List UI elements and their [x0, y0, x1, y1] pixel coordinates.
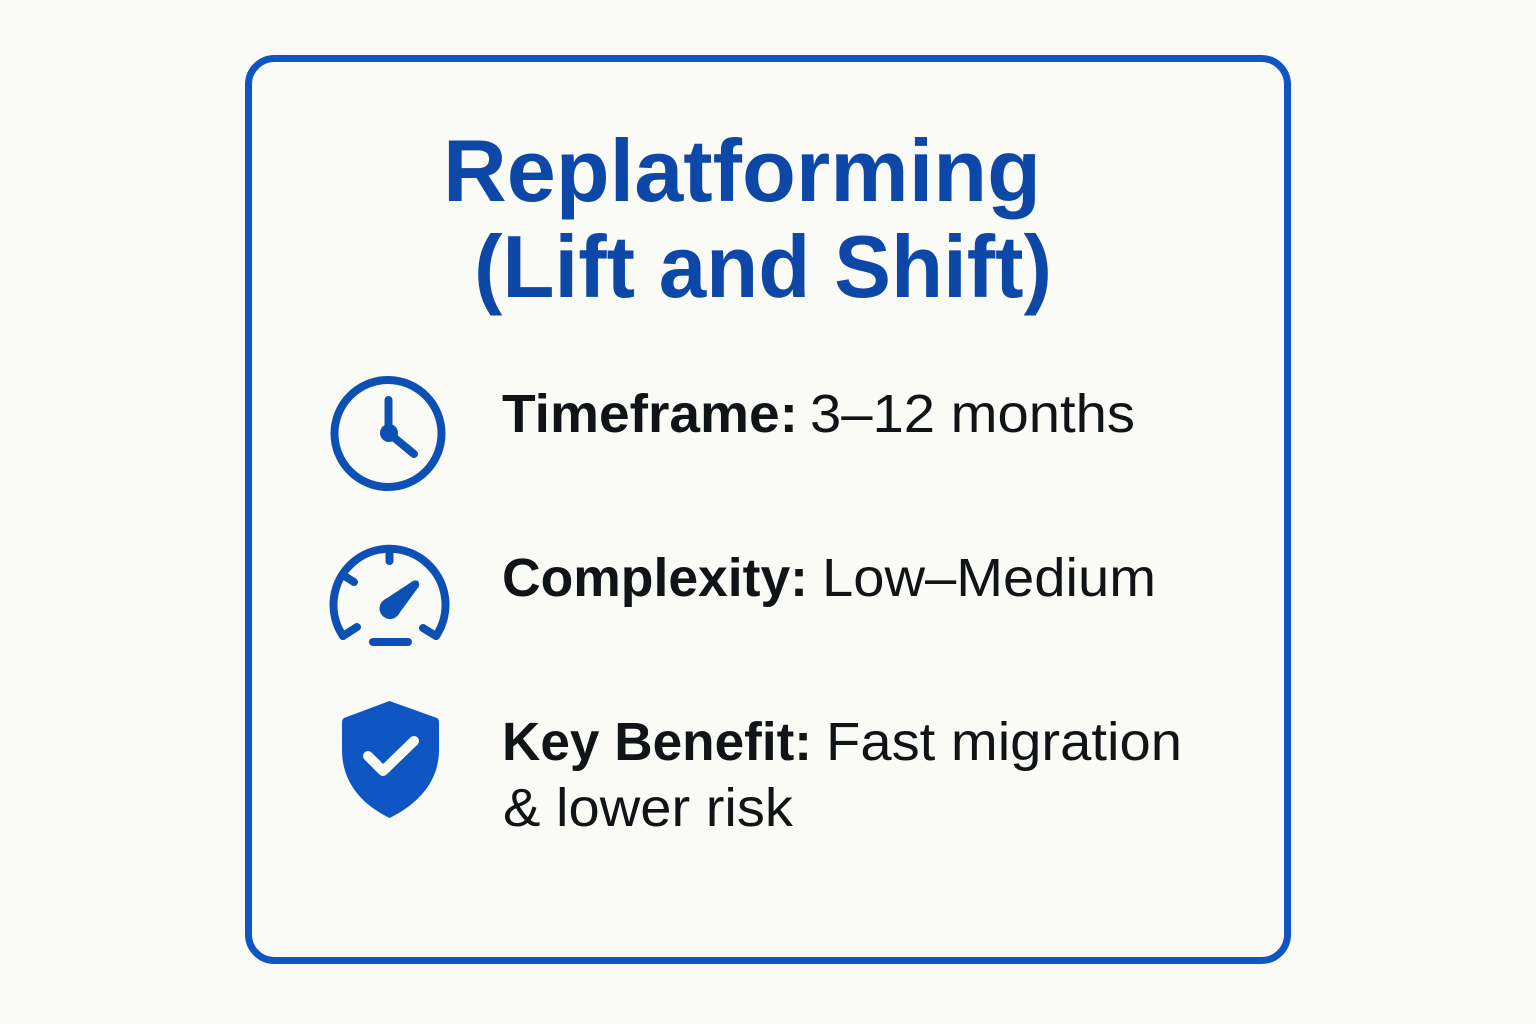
icon: shield with check: [342, 701, 439, 818]
row: key benefit: Key Benefit:: [502, 712, 812, 772]
title: [443, 121, 1052, 316]
panel: card: [248, 58, 1288, 960]
icon: clock: [334, 380, 442, 487]
row: complexity: Low–Medium: [822, 548, 1156, 608]
row: complexity: Complexity:: [502, 548, 808, 608]
row: timeframe: 3–12 months: [810, 384, 1135, 444]
row: key benefit: & lower risk: [503, 778, 794, 838]
row: timeframe: Timeframe:: [502, 384, 798, 444]
icon: gauge: [334, 549, 446, 642]
title: Replatforming: [443, 121, 1041, 220]
row: timeframe: [502, 384, 1135, 444]
row: key benefit: [502, 712, 1182, 838]
title: (Lift and Shift): [474, 217, 1052, 316]
row: complexity: [502, 548, 1156, 608]
row: key benefit: Fast migration: [826, 712, 1182, 772]
